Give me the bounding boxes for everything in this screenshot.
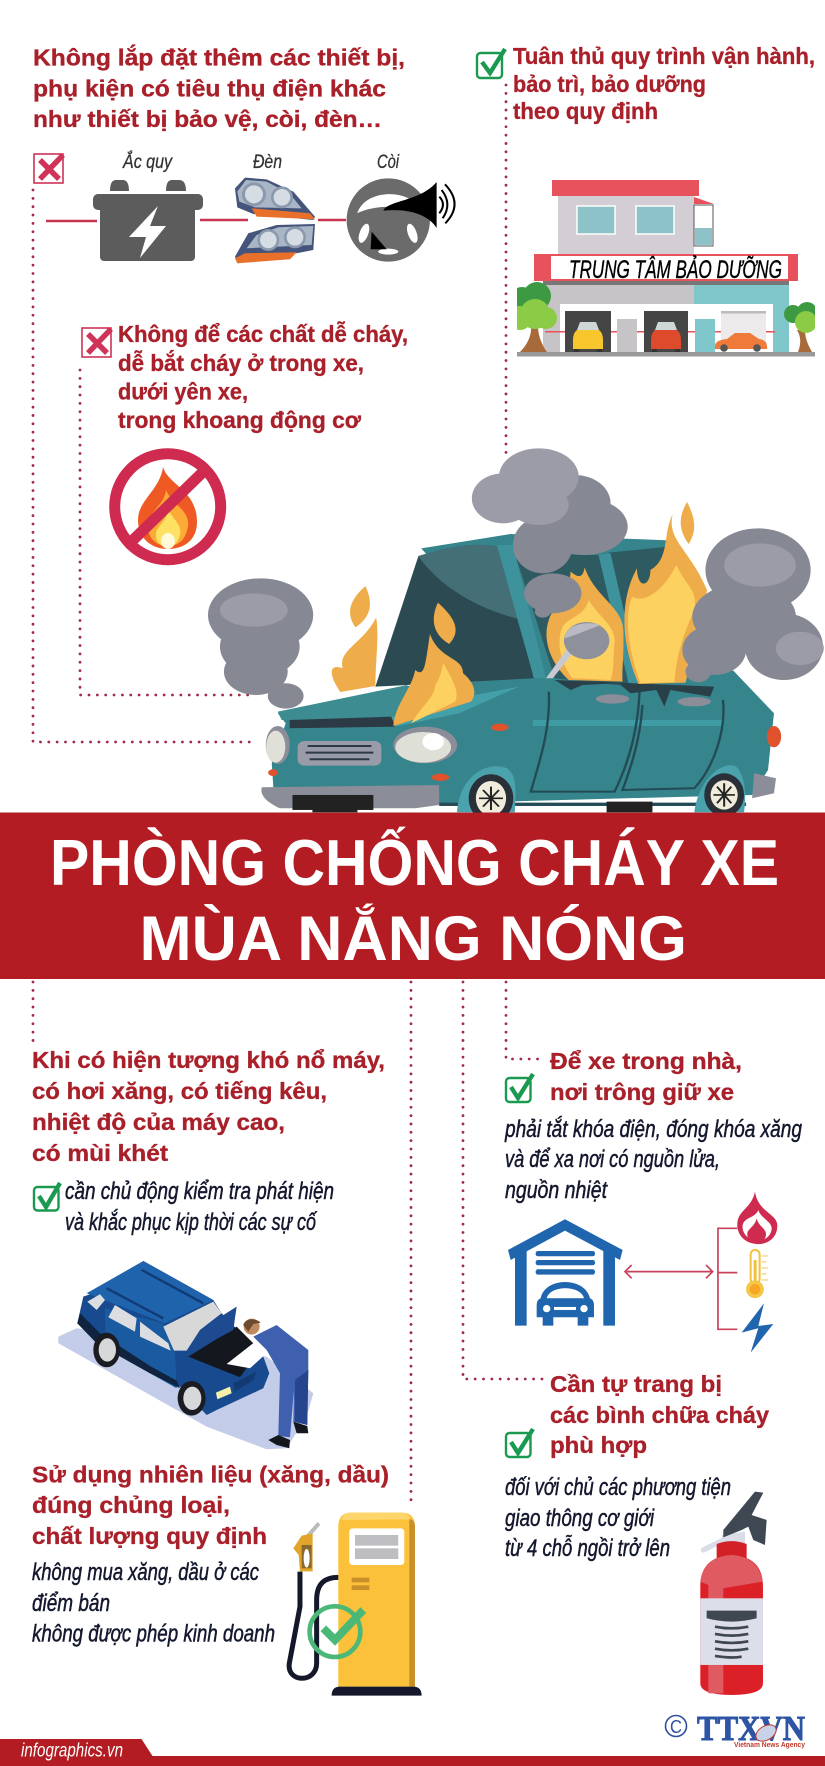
text: switch off and keep away: nguồn nhiệt xyxy=(505,1177,608,1204)
text: check and fix: cần chủ động kiểm tra phát hiện xyxy=(65,1178,334,1205)
heading: fire extinguisher xyxy=(550,1371,769,1458)
icon: battery xyxy=(93,180,203,261)
icon: cross box xyxy=(34,154,63,183)
text: owners of vehicles: từ 4 chỗ ngồi trở lên xyxy=(505,1534,670,1562)
heading: follow procedures xyxy=(513,43,815,124)
footer bar xyxy=(0,1739,825,1766)
icon: headlamps xyxy=(235,178,315,263)
car body xyxy=(268,534,781,803)
thermometer xyxy=(747,1250,768,1298)
banner: main title: MÙA NẮNG NÓNG xyxy=(140,903,687,974)
logo: TTXVN: C xyxy=(670,1717,682,1737)
garage xyxy=(508,1219,623,1326)
heading: warning signs: nhiệt độ của máy cao, xyxy=(32,1109,285,1135)
heading: correct fuel: chất lượng quy định xyxy=(32,1523,267,1549)
text: check and fix xyxy=(65,1178,334,1236)
icon: steering wheel with horn xyxy=(347,178,455,262)
icon: check box xyxy=(506,1429,533,1457)
panel: no flammables in car xyxy=(82,320,408,560)
icon: no fire sign xyxy=(115,454,221,560)
panel: correct fuel xyxy=(32,1462,422,1696)
heading: no flammables: dưới yên xe, xyxy=(118,378,248,404)
smoke: rear xyxy=(682,528,824,682)
flame xyxy=(737,1192,777,1244)
icon: check box xyxy=(477,49,505,78)
labels: battery, lamp, horn: Còi xyxy=(377,152,400,173)
text: check and fix: và khắc phục kịp thời các sự cố xyxy=(65,1209,318,1236)
banner: main title xyxy=(0,812,825,979)
labels: battery, lamp, horn: Đèn xyxy=(253,152,282,173)
trees xyxy=(508,282,817,352)
headlights and grille xyxy=(266,726,457,766)
heading: warning signs: có hơi xăng, có tiếng kêu, xyxy=(32,1078,327,1104)
illustration: fuel pump xyxy=(289,1513,422,1696)
heading: no extra accessories: như thiết bị bảo vệ, còi, đèn… xyxy=(33,106,382,132)
heading: correct fuel xyxy=(32,1462,389,1549)
icon: check box xyxy=(506,1074,533,1102)
heading: correct fuel: đúng chủng loại, xyxy=(32,1492,230,1518)
icon: check box xyxy=(34,1183,60,1210)
heading: fire extinguisher: phù hợp xyxy=(550,1432,647,1458)
heading: fire extinguisher: Cần tự trang bị xyxy=(550,1371,722,1397)
heading: no flammables: Không để các chất dễ cháy, xyxy=(118,320,408,347)
heading: no extra accessories: Không lắp đặt thêm các thiết bị, xyxy=(33,44,405,70)
illustration: burning car xyxy=(208,448,824,822)
heading: warning signs: Khi có hiện tượng khó nổ máy, xyxy=(32,1047,385,1073)
heading: no flammables: dễ bắt cháy ở trong xe, xyxy=(118,349,364,376)
footer bar: infographics.vn xyxy=(21,1740,123,1762)
heading: no extra accessories xyxy=(33,44,405,132)
text: do not buy at unlicensed points: không mua xăng, dầu ở các xyxy=(32,1559,259,1586)
logo: TTXVN xyxy=(666,1709,806,1749)
bumper and plate xyxy=(261,785,439,812)
icon: garage with hazards xyxy=(508,1192,777,1353)
heading: no flammables xyxy=(118,320,408,433)
heading: park indoors: nơi trông giữ xe xyxy=(550,1079,734,1105)
text: owners of vehicles: đối với chủ các phương tiện xyxy=(505,1474,731,1501)
connector lines xyxy=(46,220,346,221)
text: do not buy at unlicensed points xyxy=(32,1559,275,1648)
bolt xyxy=(742,1303,773,1353)
panel: park safely xyxy=(504,1048,803,1353)
smoke: roof xyxy=(472,448,628,618)
text: owners of vehicles: giao thông cơ giới xyxy=(505,1505,655,1532)
arrow and bracket xyxy=(625,1228,737,1329)
illustration: mechanic checking blue car xyxy=(58,1261,313,1449)
logo: TTXVN: Vietnam News Agency xyxy=(734,1740,806,1749)
heading: correct fuel: Sử dụng nhiên liệu (xăng, dầu) xyxy=(32,1462,389,1488)
illustration: service centre building xyxy=(508,180,817,356)
heading: follow procedures: bảo trì, bảo dưỡng xyxy=(513,71,706,97)
text: switch off and keep away: và để xa nơi có nguồn lửa, xyxy=(505,1146,720,1173)
mirror xyxy=(546,622,609,678)
panel: follow maintenance procedures xyxy=(477,43,817,356)
text: switch off and keep away xyxy=(504,1116,803,1204)
smoke: front xyxy=(208,578,313,709)
heading: park indoors xyxy=(550,1048,742,1105)
heading: fire extinguisher: các bình chữa cháy xyxy=(550,1402,769,1428)
panel: fire extinguisher xyxy=(505,1371,769,1695)
labels: battery, lamp, horn: Ắc quy xyxy=(122,151,173,173)
heading: no extra accessories: phụ kiện có tiêu thụ điện khác xyxy=(33,76,386,102)
labels: battery, lamp, horn xyxy=(122,151,400,173)
heading: follow procedures: Tuân thủ quy trình vận hành, xyxy=(513,43,815,69)
heading: park indoors: Để xe trong nhà, xyxy=(550,1048,742,1074)
text: do not buy at unlicensed points: không được phép kinh doanh xyxy=(32,1620,275,1648)
heading: no flammables: trong khoang động cơ xyxy=(118,407,361,433)
panel: no extra electrical accessories xyxy=(33,44,455,263)
wheels xyxy=(439,765,746,822)
text: owners of vehicles xyxy=(505,1474,731,1562)
heading: warning signs: có mùi khét xyxy=(32,1140,168,1166)
illustration: fire extinguisher xyxy=(700,1492,767,1695)
heading: follow procedures: theo quy định xyxy=(513,98,658,124)
logo: TTXVN: TTXVN xyxy=(697,1709,805,1748)
text: do not buy at unlicensed points: điểm bán xyxy=(32,1590,110,1617)
cars in garage xyxy=(573,322,767,352)
flames xyxy=(332,502,707,726)
heading: warning signs xyxy=(32,1047,385,1166)
panel: warning signs check xyxy=(32,1047,385,1449)
icon: cross box xyxy=(82,328,111,357)
